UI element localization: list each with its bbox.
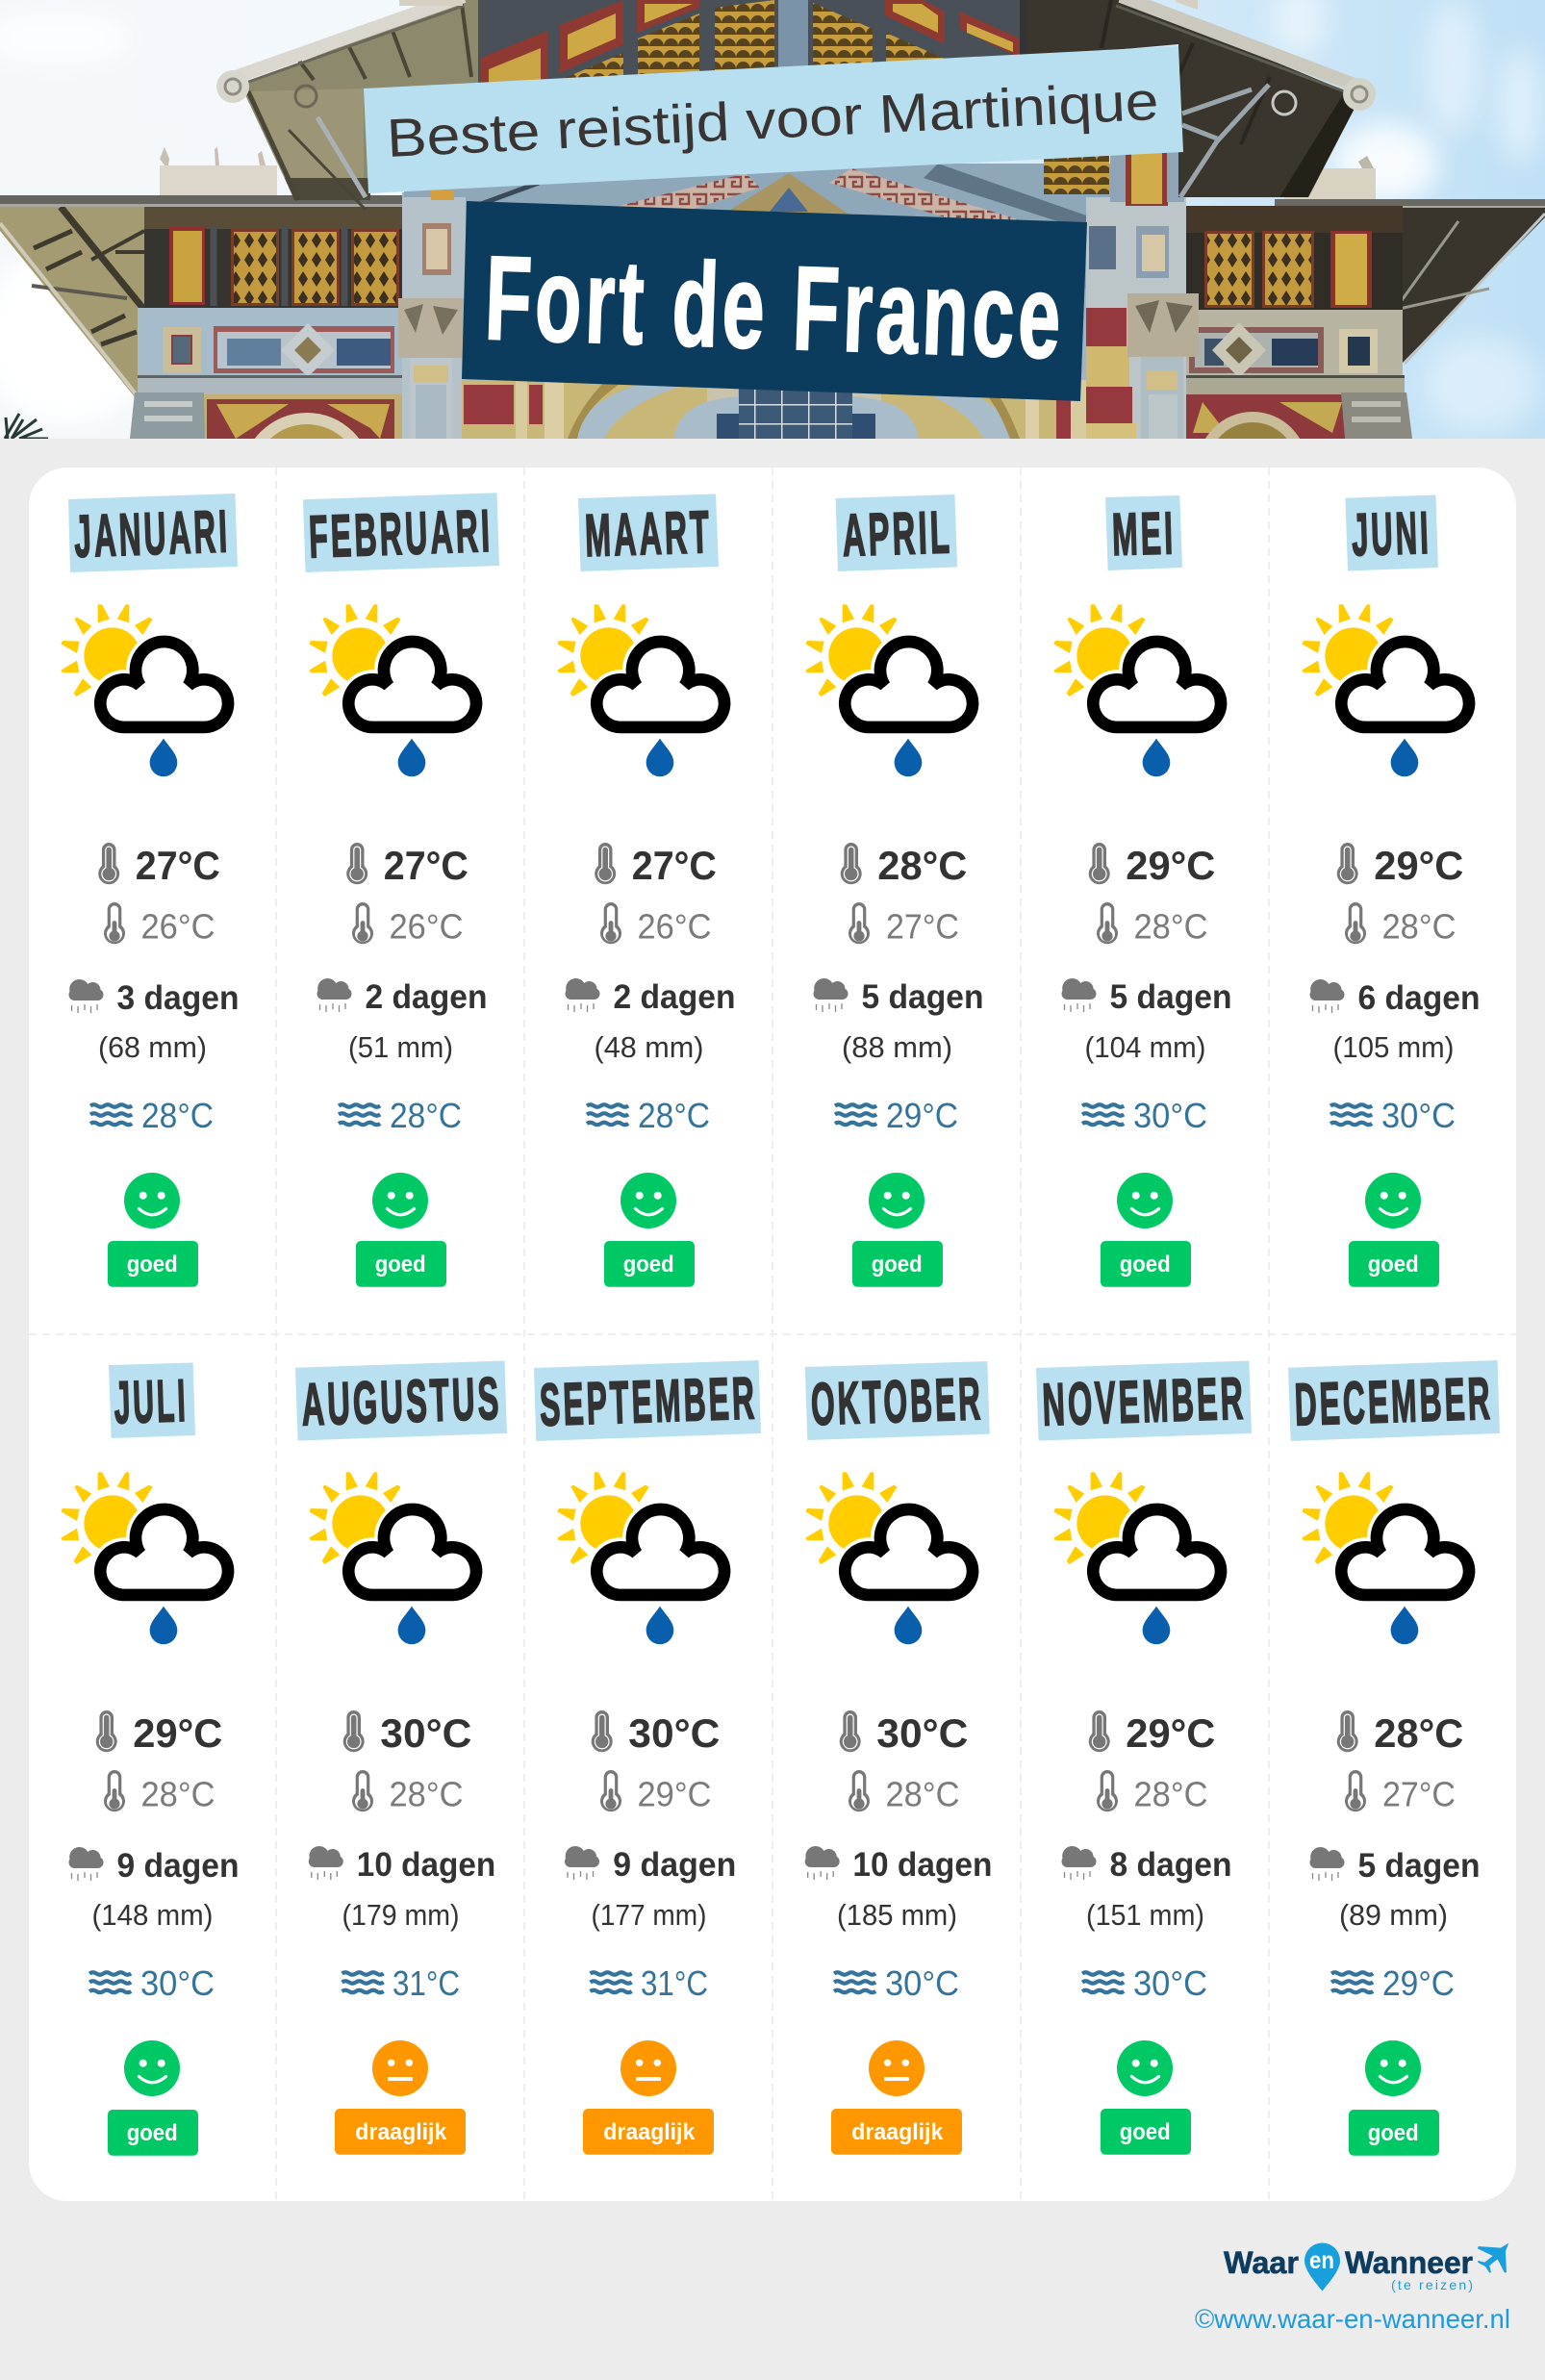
rain days: 2 dagen	[366, 978, 487, 1016]
icon: airplane	[1478, 2243, 1508, 2273]
rain days: 9 dagen	[613, 1846, 736, 1884]
label: november	[1036, 1360, 1252, 1441]
icon: waves	[587, 1104, 628, 1125]
icon: thermometer low	[1097, 1770, 1118, 1811]
rating: draaglijk	[603, 2119, 696, 2145]
max temperature: 29°C	[1126, 1710, 1215, 1756]
icon: thermometer low	[1097, 902, 1118, 944]
label: augustus	[295, 1360, 507, 1441]
rain days: 8 dagen	[1110, 1846, 1231, 1884]
rating: goed	[1368, 2120, 1419, 2146]
icon: sun, cloud and rain	[309, 1472, 476, 1644]
icon: rain cloud	[69, 1847, 104, 1881]
month: maart	[557, 494, 735, 1287]
panel: month grid	[29, 468, 1516, 2201]
label: september	[534, 1360, 761, 1441]
icon: sun, cloud and rain	[61, 604, 228, 776]
subtitle banner	[364, 46, 1183, 193]
rainfall: (151 mm)	[1086, 1898, 1204, 1932]
icon: rain cloud	[1062, 978, 1097, 1012]
rating	[1349, 1241, 1439, 1287]
icon: smiley	[1365, 1173, 1421, 1228]
icon: thermometer low	[352, 902, 373, 944]
icon: smiley	[124, 2040, 180, 2096]
icon: map pin	[1304, 2243, 1340, 2291]
min temperature: 26°C	[637, 907, 712, 947]
icon: neutral face	[869, 2040, 924, 2096]
sea temperature: 31°C	[393, 1963, 460, 2003]
rating	[1101, 1241, 1191, 1287]
label: november: NOVEMBER	[1041, 1366, 1247, 1438]
month: juli	[61, 1362, 240, 2156]
label: oktober: OKTOBER	[810, 1366, 984, 1438]
label: maart: MAART	[584, 499, 713, 570]
label: juli	[109, 1362, 195, 1438]
min temperature: 28°C	[1381, 907, 1456, 947]
month: november	[1036, 1360, 1252, 2155]
rain days: 6 dagen	[1358, 979, 1480, 1017]
rain days: 10 dagen	[357, 1846, 495, 1884]
icon: thermometer low	[1345, 1770, 1366, 1811]
rainfall: (89 mm)	[1339, 1898, 1448, 1932]
icon: sun, cloud and rain	[61, 1472, 228, 1644]
rainfall: (177 mm)	[591, 1898, 706, 1932]
min temperature: 28°C	[885, 1775, 960, 1814]
icon: rain cloud	[309, 1846, 343, 1880]
icon: sun, cloud and rain	[805, 604, 973, 776]
max temperature: 27°C	[384, 843, 469, 888]
min temperature: 28°C	[389, 1775, 464, 1814]
icon: thermometer low	[1345, 902, 1366, 944]
icon: smiley	[1117, 2040, 1173, 2096]
min temperature: 29°C	[637, 1775, 712, 1814]
icon: waves	[89, 1972, 131, 1992]
label: juni	[1345, 494, 1438, 571]
label: maart	[578, 494, 719, 571]
rating	[583, 2109, 714, 2155]
rainfall: (68 mm)	[98, 1030, 207, 1064]
label: juli: JULI	[113, 1368, 190, 1436]
label: april	[836, 494, 957, 571]
max temperature: 30°C	[380, 1710, 471, 1756]
title banner: Fort de France	[483, 232, 1066, 384]
min temperature: 27°C	[886, 907, 959, 947]
rainfall: (48 mm)	[595, 1030, 704, 1064]
icon: waves	[90, 1104, 132, 1125]
max temperature: 27°C	[136, 843, 220, 888]
label: oktober	[805, 1361, 990, 1440]
rain days: 9 dagen	[117, 1847, 239, 1885]
sea temperature: 28°C	[638, 1096, 710, 1135]
rating	[108, 2110, 198, 2156]
rainfall: (185 mm)	[837, 1898, 957, 1932]
rainfall: (88 mm)	[842, 1030, 952, 1064]
rain days: 5 dagen	[862, 978, 983, 1016]
icon: thermometer low	[848, 1770, 870, 1811]
month: juni	[1302, 494, 1480, 1287]
icon: smiley	[621, 1173, 676, 1228]
rainfall: (51 mm)	[348, 1030, 453, 1064]
rain days: 3 dagen	[117, 979, 239, 1017]
icon: rain cloud	[1310, 979, 1345, 1013]
icon: smiley	[372, 1173, 428, 1228]
rain days: 5 dagen	[1358, 1847, 1480, 1885]
rating: draaglijk	[851, 2119, 944, 2145]
label: april: APRIL	[842, 499, 953, 570]
icon: thermometer high	[841, 843, 862, 884]
rating: goed	[623, 1252, 674, 1278]
icon: sun, cloud and rain	[1053, 604, 1221, 776]
min temperature: 28°C	[1133, 1775, 1208, 1814]
rainfall: (105 mm)	[1333, 1030, 1455, 1064]
min temperature: 27°C	[1382, 1775, 1456, 1814]
rating: draaglijk	[355, 2119, 447, 2145]
icon: thermometer low	[104, 1770, 125, 1811]
label: mei	[1105, 495, 1182, 570]
icon: sun, cloud and rain	[1302, 604, 1469, 776]
icon: rain cloud	[1062, 1846, 1097, 1880]
rainfall: (104 mm)	[1085, 1030, 1206, 1064]
rating: goed	[1368, 1252, 1419, 1278]
icon: sun, cloud and rain	[1053, 1472, 1221, 1644]
min temperature: 28°C	[1133, 907, 1208, 947]
icon: sun, cloud and rain	[805, 1472, 973, 1644]
label: augustus: AUGUSTUS	[300, 1366, 503, 1438]
icon: thermometer high	[595, 843, 616, 884]
icon: thermometer high	[343, 1710, 365, 1752]
icon: thermometer high	[98, 843, 119, 884]
icon: sun, cloud and rain	[557, 1472, 724, 1644]
icon: waves	[1330, 1104, 1372, 1125]
label: juni: JUNI	[1351, 500, 1432, 569]
sea temperature: 30°C	[885, 1963, 959, 2003]
label: januari	[68, 494, 238, 572]
icon: smiley	[869, 1173, 924, 1228]
logo: Waar en Wanneer	[1224, 2243, 1508, 2292]
month: februari	[303, 493, 499, 1287]
icon: waves	[1331, 1972, 1373, 1992]
max temperature: 29°C	[1374, 843, 1463, 888]
rainfall: (179 mm)	[342, 1898, 460, 1932]
icon: thermometer high	[1089, 843, 1110, 884]
icon: thermometer low	[600, 902, 621, 944]
icon: sun, cloud and rain	[557, 604, 724, 776]
max temperature: 28°C	[877, 843, 967, 888]
month: april	[805, 494, 983, 1287]
rating: goed	[1120, 1252, 1171, 1278]
sea temperature: 30°C	[1133, 1963, 1207, 2003]
icon: smiley	[124, 1173, 180, 1228]
subtitle banner: Beste reistijd voor Martinique	[386, 70, 1160, 168]
icon: waves	[835, 1104, 876, 1125]
icon: rain cloud	[566, 978, 600, 1012]
rain days: 10 dagen	[852, 1846, 992, 1884]
icon: waves	[1082, 1104, 1124, 1125]
max temperature: 27°C	[632, 843, 717, 888]
icon: thermometer low	[104, 902, 125, 944]
label: februari: FEBRUARI	[308, 498, 494, 570]
rain days: 2 dagen	[614, 978, 735, 1016]
label: februari	[303, 493, 499, 572]
max temperature: 30°C	[876, 1710, 968, 1756]
max temperature: 28°C	[1374, 1710, 1463, 1756]
icon: sun, cloud and rain	[1302, 1472, 1469, 1644]
label: januari: JANUARI	[73, 498, 231, 570]
rating	[108, 1241, 198, 1287]
icon: smiley	[1117, 1173, 1173, 1228]
header photo: Bibliothèque Schoelcher facade	[0, 0, 1545, 439]
copyright url: ©www.waar-en-wanneer.nl	[1195, 2304, 1510, 2334]
icon: map pin: en	[1309, 2247, 1334, 2274]
sea temperature: 28°C	[141, 1096, 214, 1135]
rating: goed	[127, 1252, 178, 1278]
label: september: SEPTEMBER	[539, 1365, 758, 1439]
icon: thermometer low	[352, 1770, 373, 1811]
rating	[604, 1241, 695, 1287]
min temperature: 26°C	[140, 907, 215, 947]
icon: waves	[591, 1972, 632, 1992]
rating	[356, 1241, 446, 1287]
icon: thermometer high	[840, 1710, 861, 1752]
icon: thermometer high	[592, 1710, 613, 1752]
icon: waves	[1082, 1972, 1124, 1992]
sea temperature: 29°C	[1382, 1963, 1455, 2003]
rainfall: (148 mm)	[92, 1898, 214, 1932]
rating	[852, 1241, 943, 1287]
icon: rain cloud	[317, 978, 352, 1012]
icon: rain cloud	[565, 1846, 599, 1880]
icon: rain cloud	[69, 979, 104, 1013]
title banner	[462, 201, 1087, 401]
sea temperature: 29°C	[886, 1096, 958, 1135]
month: september	[534, 1360, 761, 2155]
month: januari	[61, 494, 240, 1287]
rating	[1349, 2110, 1439, 2156]
icon: waves	[342, 1972, 384, 1992]
gable panels	[478, 0, 1020, 83]
max temperature: 29°C	[1126, 843, 1215, 888]
icon: thermometer low	[848, 902, 870, 944]
icon: waves	[339, 1104, 380, 1125]
icon: neutral face	[621, 2040, 676, 2096]
rating	[1101, 2109, 1191, 2155]
icon: thermometer high	[346, 843, 367, 884]
icon: rain cloud	[814, 978, 848, 1012]
month: oktober	[805, 1361, 992, 2155]
logo: Waar en Wanneer: (te reizen)	[1391, 2277, 1473, 2292]
month: december	[1288, 1360, 1500, 2156]
max temperature: 30°C	[628, 1710, 720, 1756]
icon: rain cloud	[805, 1846, 840, 1880]
rating	[831, 2109, 962, 2155]
sea temperature: 30°C	[1133, 1096, 1207, 1135]
icon: thermometer high	[1089, 1710, 1110, 1752]
sea temperature: 30°C	[1381, 1096, 1456, 1135]
icon: sun, cloud and rain	[309, 604, 476, 776]
month: mei	[1053, 495, 1231, 1287]
rating: goed	[872, 1252, 923, 1278]
icon: waves	[834, 1972, 875, 1992]
icon: thermometer low	[600, 1770, 621, 1811]
max temperature: 29°C	[133, 1710, 222, 1756]
rating: goed	[1120, 2119, 1171, 2145]
icon: thermometer high	[1337, 843, 1358, 884]
month: augustus	[295, 1360, 507, 2155]
icon: neutral face	[372, 2040, 428, 2096]
sea temperature: 28°C	[390, 1096, 462, 1135]
icon: smiley	[1365, 2040, 1421, 2096]
sea temperature: 31°C	[641, 1963, 708, 2003]
min temperature: 26°C	[389, 907, 464, 947]
icon: thermometer high	[96, 1710, 117, 1752]
rain days: 5 dagen	[1110, 978, 1231, 1016]
icon: thermometer high	[1337, 1710, 1358, 1752]
rating	[335, 2109, 466, 2155]
icon: rain cloud	[1310, 1847, 1345, 1881]
logo: Waar en Wanneer: Wanneer	[1345, 2245, 1473, 2280]
sea temperature: 30°C	[140, 1963, 215, 2003]
logo: Waar en Wanneer: Waar	[1224, 2245, 1299, 2280]
min temperature: 28°C	[140, 1775, 215, 1814]
rating: goed	[375, 1252, 426, 1278]
rating: goed	[127, 2120, 178, 2146]
label: mei: MEI	[1111, 500, 1177, 569]
pediment	[404, 164, 1185, 289]
